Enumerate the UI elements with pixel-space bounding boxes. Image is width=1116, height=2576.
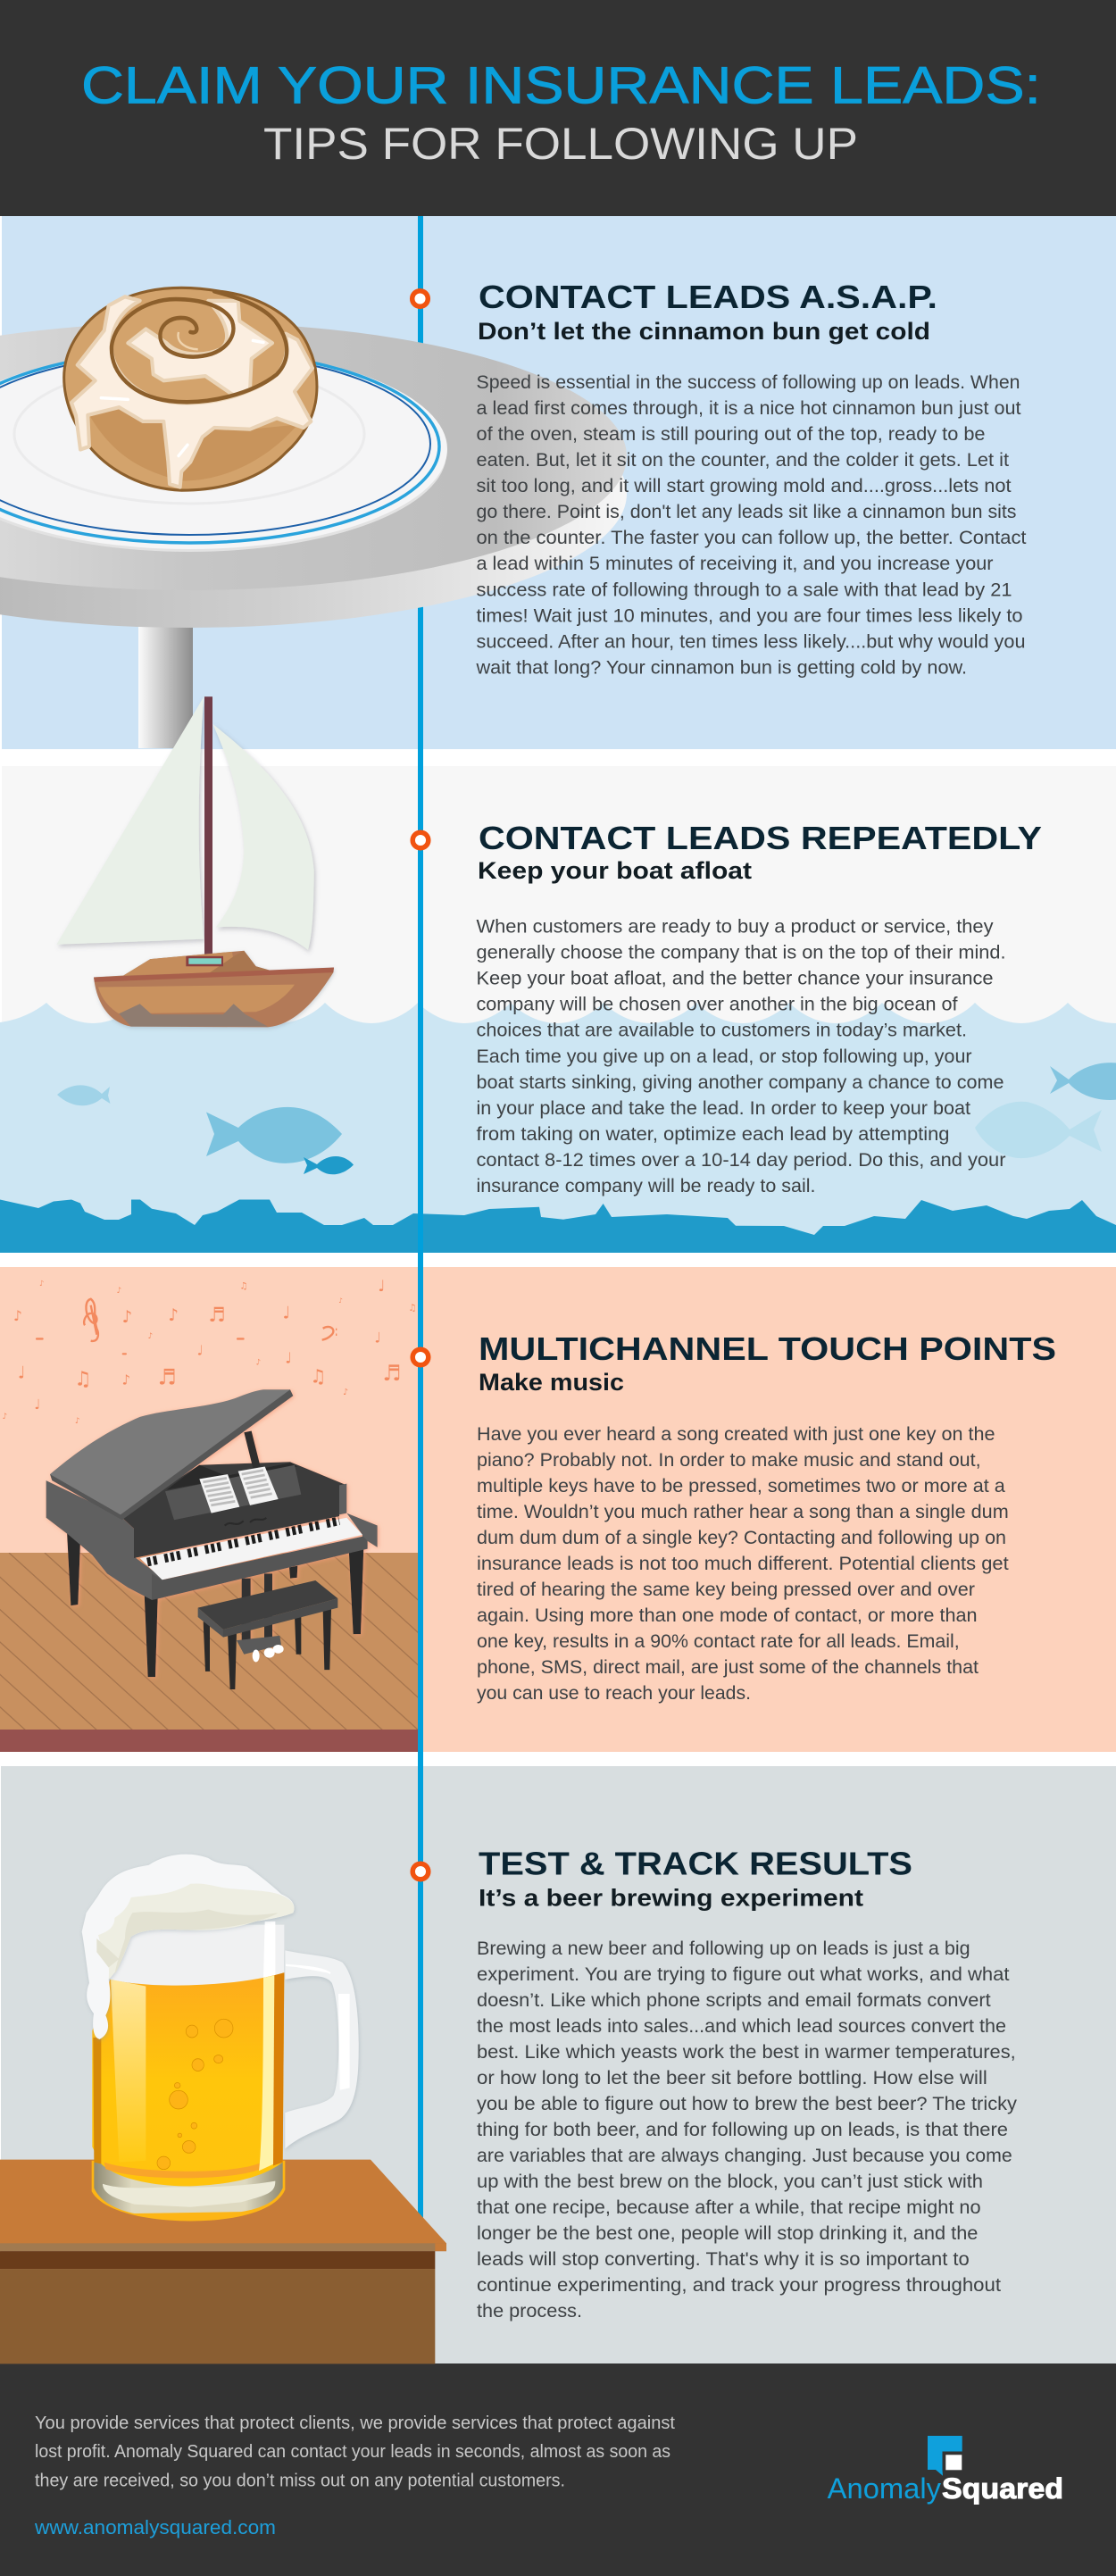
icon: table [0, 2160, 446, 2363]
marker: section 4 [412, 1863, 429, 1880]
icon: music notes: ♪ [256, 1358, 261, 1368]
text block: test and track results: continue experimenting, and track your progress throughout [477, 2274, 1001, 2296]
text block: test and track results: up with the best brew on the block, you can’t just stick with [477, 2171, 983, 2192]
text block: test and track results: experiment. You are trying to figure out what works, and what [477, 1963, 1010, 1985]
header band [0, 0, 1116, 216]
text block: test and track results: longer be the best one, people will stop drinking it, and the [477, 2222, 978, 2244]
ocean water [0, 1003, 1116, 1253]
marker: section 2 [412, 832, 429, 848]
title [81, 57, 1041, 169]
case side [46, 1480, 163, 1600]
timeline line [418, 216, 423, 2234]
footer text: they are received, so you don’t miss out on any potential customers. [35, 2472, 565, 2491]
icon: large fish [206, 1107, 342, 1163]
bubbles [157, 2019, 233, 2170]
icon: music notes: ♪ [3, 1413, 7, 1421]
text block: contact leads asap: Speed is essential in the success of following up on leads. When [477, 371, 1020, 393]
treble clef [84, 1299, 98, 1341]
text block: contact leads repeatedly: choices that are available to customers in today’s market. [477, 1020, 967, 1041]
icon: grand piano [46, 1389, 378, 1677]
text block: contact leads asap: go there. Point is, don't let any leads sit like a cinnamon bun sits [477, 501, 1016, 522]
text block: contact leads repeatedly: from taking on water, optimize each lead by attempting [477, 1123, 950, 1145]
heading: test and track results [479, 1845, 912, 1911]
icon: sailboat [56, 696, 334, 1027]
heading: multichannel touch points [479, 1330, 1056, 1396]
text block: multichannel touch points: time. Wouldn’t you much rather hear a song than a single dum [477, 1501, 1009, 1522]
panel: multichannel touch points background [0, 1267, 1116, 1752]
keyboard [140, 1518, 362, 1580]
icon: music notes: ♪ [39, 1279, 44, 1288]
marker: section 3 [412, 1349, 429, 1365]
heading: contact leads asap [478, 279, 937, 345]
heading: contact leads repeatedly: Keep your boat afloat [478, 857, 752, 884]
wood floor [0, 1553, 418, 1730]
text block: test and track results: Brewing a new beer and following up on leads is just a big [477, 1938, 970, 1959]
baseboard [0, 1730, 418, 1752]
text block: test and track results: the process. [477, 2300, 582, 2322]
icon: music notes: ♪ [122, 1371, 130, 1388]
text block: test and track results: that one recipe, because after a while, that recipe might no [477, 2197, 981, 2218]
text block: test and track results: leads will stop converting. That's why it is so important to [477, 2248, 970, 2270]
marker: section 1 [412, 291, 428, 306]
icon: music notes: ♫ [239, 1281, 247, 1292]
bass clef [322, 1327, 337, 1340]
text block: test and track results: best. Like which yeasts work the best in warmer temperatures, [477, 2041, 1016, 2063]
icon: small fish [57, 1085, 111, 1105]
icon: music notes: ♪ [75, 1417, 80, 1426]
keyboard cheek [346, 1513, 378, 1547]
icon: music notes: ♪ [122, 1307, 132, 1327]
footer text: lost profit. Anomaly Squared can contact your leads in seconds, almost as soon as [35, 2442, 670, 2462]
left leg [67, 1531, 80, 1605]
footer text [35, 2413, 675, 2491]
text block: contact leads repeatedly: generally choose the company that is on the top of their mind. [477, 942, 1005, 963]
icon: music notes: ♩ [197, 1342, 204, 1358]
icon: music notes: ♩ [285, 1349, 292, 1366]
text block: contact leads asap: sit too long, and it will start growing mold and....gross...lets not [477, 475, 1012, 496]
cinnamon bun [64, 288, 317, 490]
icon: piano bench [198, 1580, 337, 1689]
icon: table leg [138, 621, 193, 748]
mast [204, 696, 212, 955]
text block: multichannel touch points: piano? Probably not. In order to make music and stand out, [477, 1449, 981, 1471]
panel: contact leads asap background [2, 216, 1116, 749]
icon: music notes: ♬ [208, 1304, 225, 1327]
text block: contact leads asap: wait that long? Your cinnamon bun is getting cold by now. [475, 657, 967, 679]
text block: contact leads asap: of the oven, steam is still pouring out of the top, ready to be [477, 423, 986, 445]
table top [0, 322, 627, 628]
text block: contact leads repeatedly: insurance company will be ready to sail. [477, 1175, 816, 1196]
footer text: You provide services that protect clients, we provide services that protect against [35, 2413, 675, 2433]
music stand [165, 1465, 301, 1520]
text block: test and track results: you be able to figure out how to brew the best beer? The tricky [477, 2093, 1017, 2114]
icon: music notes: ♩ [34, 1396, 40, 1413]
text block: contact leads asap: eaten. But, let it sit on the counter, and the colder it gets. Let it [477, 449, 1009, 471]
heading: multichannel touch points: Make music [479, 1369, 624, 1396]
heading: contact leads repeatedly [478, 820, 1042, 884]
icon: music notes: ♩ [378, 1278, 385, 1296]
plate [0, 349, 447, 552]
text block: contact leads repeatedly [477, 916, 1005, 1196]
text block: multichannel touch points: dum dum dum of a single key? Contacting and following up on [477, 1527, 1006, 1548]
footer url: www.anomalysquared.com [34, 2516, 276, 2538]
icon: music notes: ♪ [117, 1287, 121, 1296]
logo: Anomaly Squared [828, 2436, 1063, 2505]
icon: pale fish at right [975, 1102, 1102, 1158]
lid [50, 1389, 293, 1520]
title: CLAIM YOUR INSURANCE LEADS: [81, 57, 1041, 114]
text block: contact leads asap: success rate of following through to a sale with that lead by 21 [477, 579, 1012, 600]
sheet music [199, 1466, 279, 1513]
heading: contact leads asap: CONTACT LEADS A.S.A.P. [479, 279, 937, 315]
icon: music notes [3, 1278, 416, 1426]
text block: test and track results [477, 1938, 1017, 2322]
heading: test and track results: TEST & TRACK RESULTS [479, 1845, 912, 1882]
text block: contact leads asap: on the counter. The faster you can follow up, the better. Contact [477, 527, 1027, 548]
rear leg [289, 1566, 297, 1579]
icon: music notes: ♫ [74, 1368, 91, 1391]
text block: multichannel touch points: again. Using more than one mode of contact, or more than [477, 1605, 978, 1626]
logo: Anomaly Squared: Anomaly [828, 2472, 941, 2505]
panel: contact leads repeatedly background [0, 766, 1116, 1253]
text block: multichannel touch points: you can use to reach your leads. [477, 1682, 751, 1704]
heading: contact leads asap: Don’t let the cinnamon bun get cold [478, 318, 930, 345]
sails [56, 696, 314, 950]
icon: music notes: ♬ [382, 1360, 401, 1386]
heading: contact leads repeatedly: CONTACT LEADS REPEATEDLY [479, 820, 1042, 856]
icon: music notes: ♩ [18, 1363, 25, 1382]
logo: Anomaly Squared: Squared [942, 2472, 1063, 2505]
icon: music notes: ♫ [310, 1365, 326, 1388]
text block: test and track results: or how long to let the beer sit before bottling. How else will [477, 2067, 987, 2088]
icon: music notes: ♩ [283, 1304, 290, 1322]
text block: contact leads repeatedly: Each time you give up on a lead, or stop following up, your [477, 1046, 971, 1067]
icon: small dark fish [304, 1156, 354, 1174]
heading: multichannel touch points: MULTICHANNEL TOUCH POINTS [479, 1330, 1056, 1367]
text block: multichannel touch points: tired of hearing the same key being pressed over and over [477, 1579, 975, 1600]
text block: contact leads repeatedly: in your place and take the lead. In order to keep your boat [477, 1097, 970, 1119]
front leg [145, 1594, 158, 1677]
panel: test and track background [1, 1766, 1116, 2363]
text block: contact leads asap: a lead first comes through, it is a nice hot cinnamon bun just out [477, 397, 1021, 419]
text block: test and track results: thing for both beer, and for following up on leads, is that there [477, 2119, 1008, 2140]
text block: multichannel touch points: insurance leads is not too much different. Potential clients get [477, 1553, 1009, 1574]
subtitle: TIPS FOR FOLLOWING UP [263, 119, 858, 169]
icon: fish at right edge [1050, 1063, 1116, 1100]
text block: contact leads asap: times! Wait just 10 minutes, and you are four times less likely to [477, 605, 1023, 627]
text block: multichannel touch points: one key, results in a 90% contact rate for all leads. Email, [477, 1630, 960, 1652]
heading: test and track results: It’s a beer brewing experiment [479, 1884, 863, 1911]
text block: test and track results: are variables that are always changing. Just because you come [477, 2145, 1012, 2166]
icon: music notes: ♫ [408, 1304, 416, 1313]
text block: contact leads repeatedly: company will be chosen over another in the big ocean of [477, 994, 958, 1015]
icon: music notes: ♪ [168, 1306, 179, 1325]
icon: music notes: ♪ [13, 1307, 22, 1324]
text block: multichannel touch points [477, 1423, 1009, 1704]
handle [285, 1950, 359, 2148]
icon: music notes: ♪ [148, 1332, 153, 1341]
text block: contact leads repeatedly: Keep your boat afloat, and the better chance your insurance [477, 968, 993, 989]
text block: contact leads repeatedly: boat starts sinking, giving another company a chance to come [477, 1071, 1004, 1093]
text block: contact leads asap: succeed. After an hour, ten times less likely....but why would you [477, 630, 1025, 652]
text block: multichannel touch points: phone, SMS, direct mail, are just some of the channels that [477, 1656, 979, 1678]
beer [92, 1972, 284, 2186]
front rail [128, 1537, 368, 1600]
icon: table with plate and cinnamon bun [0, 288, 627, 628]
lyre [242, 1573, 272, 1646]
icon: music notes: ♪ [343, 1388, 348, 1397]
text block: multichannel touch points: multiple keys have to be pressed, sometimes two or more at a [477, 1475, 1005, 1496]
icon: beer mug [82, 1855, 359, 2221]
footer band [0, 2363, 1116, 2576]
text block: multichannel touch points: Have you ever heard a song created with just one key on the [477, 1423, 995, 1445]
text block: test and track results: the most leads into sales...and which lead sources convert the [477, 2015, 1006, 2037]
glass upper [110, 1925, 284, 1986]
text block: contact leads asap [475, 371, 1027, 679]
icon: music notes: ♪ [338, 1296, 343, 1305]
icon: music notes: ♩ [374, 1329, 381, 1346]
case interior [121, 1462, 346, 1558]
ornament [225, 1518, 266, 1525]
icon: music notes: ♬ [158, 1364, 177, 1390]
glass base [92, 2161, 285, 2221]
right leg [349, 1547, 363, 1634]
text block: contact leads repeatedly: When customers are ready to buy a product or service, they [477, 916, 994, 938]
foam [82, 1855, 295, 2039]
text block: contact leads asap: a lead within 5 minutes of receiving it, and you increase your [477, 553, 993, 574]
dark wave band [0, 1200, 1116, 1253]
text block: test and track results: doesn’t. Like which phone scripts and email formats convert [477, 1989, 991, 2011]
hull [94, 951, 334, 1027]
text block: contact leads repeatedly: contact 8-12 times over a 10-14 day period. Do this, and your [477, 1149, 1005, 1171]
